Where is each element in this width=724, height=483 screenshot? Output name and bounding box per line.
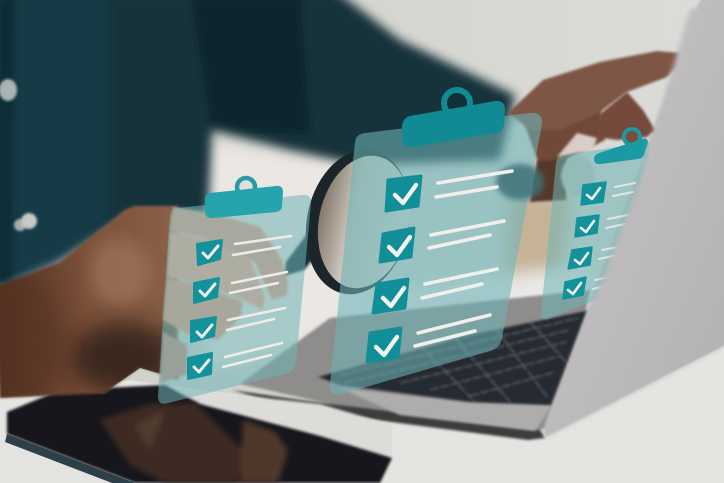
shirt cuff glimpse bbox=[557, 133, 597, 157]
right checkboxes bbox=[563, 182, 606, 299]
laptop lid edge over right clipboard bbox=[545, 0, 724, 437]
white table strip bbox=[172, 388, 392, 458]
center checkboxes bbox=[367, 176, 421, 362]
table surface bbox=[0, 345, 724, 483]
left checkboxes bbox=[188, 240, 222, 379]
laptop lid main face bbox=[552, 0, 724, 432]
thumb shadow through center board bbox=[496, 164, 544, 200]
reflection of hand in tablet bbox=[100, 403, 288, 483]
background: white area behind clipboards bbox=[205, 140, 590, 370]
palm bbox=[525, 105, 605, 162]
laptop base bbox=[232, 290, 590, 440]
right check marks bbox=[568, 188, 600, 294]
laptop screen lid bbox=[545, 0, 724, 437]
center text lines bbox=[415, 171, 512, 346]
left text lines bbox=[223, 236, 291, 367]
center clipboard bbox=[330, 90, 544, 395]
thumb nail bbox=[561, 156, 595, 196]
right hand pointing at screen bbox=[508, 51, 680, 202]
fingers seen through left board bbox=[160, 207, 288, 383]
right text lines bbox=[593, 183, 635, 289]
middle finger bbox=[597, 92, 655, 140]
left hand holding magnifier bbox=[0, 206, 180, 400]
right clipboard board bbox=[541, 142, 650, 319]
center clipboard clip bbox=[402, 90, 505, 147]
right clipboard clip bbox=[594, 129, 648, 164]
center clipboard board bbox=[330, 113, 542, 395]
laptop keyboard bbox=[318, 310, 590, 405]
shirt buttons bbox=[0, 79, 37, 231]
center check marks bbox=[376, 185, 416, 355]
tablet on desk bbox=[5, 385, 392, 483]
index finger bbox=[508, 51, 680, 130]
magnifying glass bbox=[284, 140, 423, 304]
left clipboard board bbox=[158, 195, 311, 404]
left clipboard clip bbox=[205, 178, 283, 218]
thumb bbox=[530, 158, 567, 202]
left clipboard bbox=[158, 178, 311, 404]
left check marks bbox=[194, 246, 218, 372]
right clipboard bbox=[541, 129, 650, 319]
dark teal shirt bbox=[0, 0, 515, 292]
